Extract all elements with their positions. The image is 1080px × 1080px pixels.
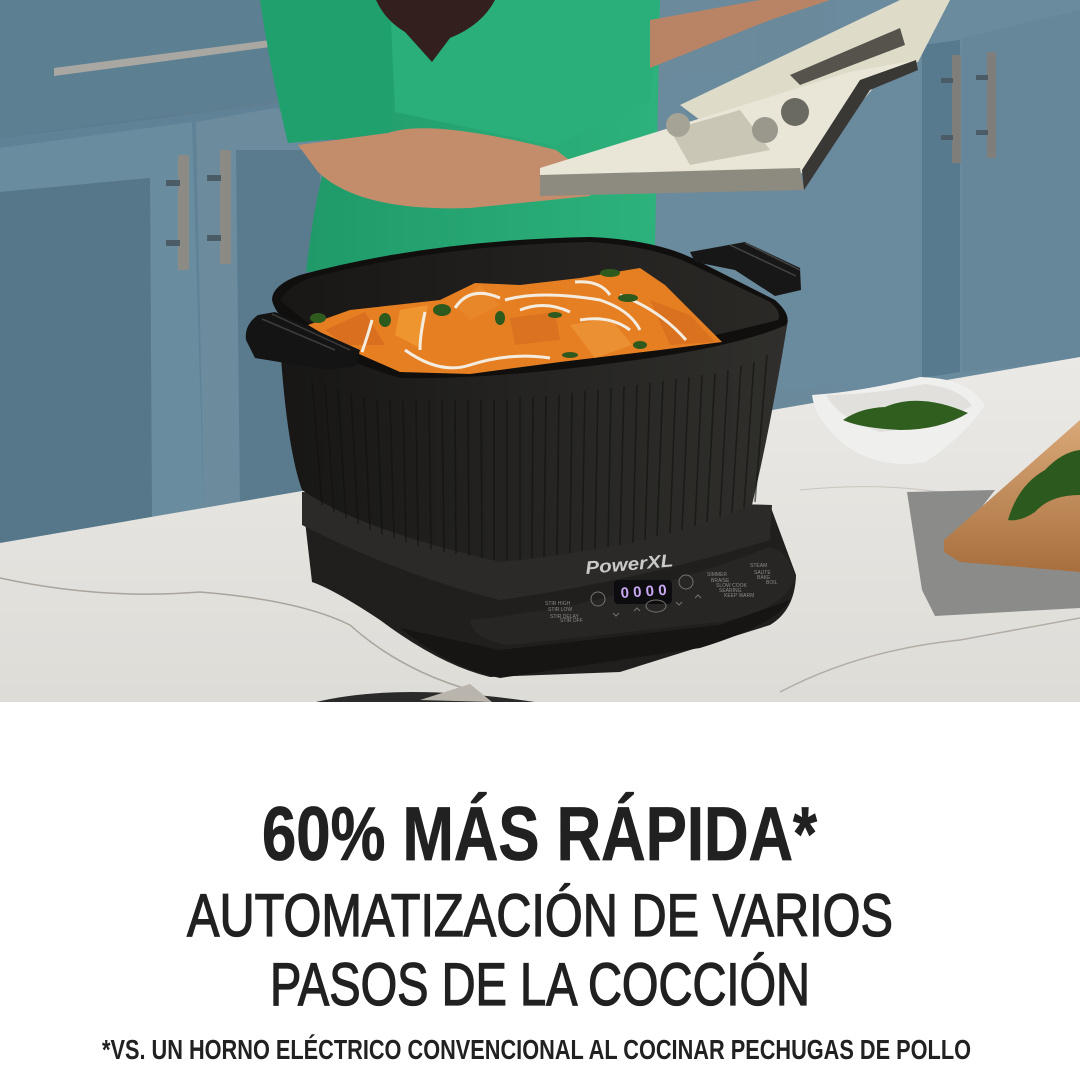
base (302, 492, 796, 678)
function labels: SAUTE (754, 570, 771, 576)
PowerXL logo: PowerXL (585, 550, 674, 578)
function labels: KEEP WARM (724, 593, 754, 599)
food: chicken curry (308, 268, 722, 374)
function labels: STIR HIGH (545, 601, 571, 607)
cabinets background (0, 0, 1080, 560)
white caption panel (0, 702, 1080, 1080)
headline: 60% MÁS RÁPIDA* (262, 792, 817, 877)
function labels: STIR LOW (548, 607, 572, 613)
lid handle (420, 684, 492, 702)
handle: left (246, 312, 360, 370)
cutting board (944, 420, 1080, 572)
function labels: SEARING (719, 588, 742, 594)
digital display (614, 580, 672, 604)
parsley (1008, 450, 1080, 520)
towel (907, 490, 1080, 616)
open book (540, 0, 950, 196)
function labels: STIR OFF (560, 618, 583, 624)
subheading line 2: PASOS DE LA COCCIÓN (270, 951, 810, 1018)
control buttons (591, 575, 701, 616)
person: green top and arms (260, 0, 830, 272)
ribbed pot body (278, 305, 788, 562)
appliance: PowerXL cooker (246, 237, 801, 678)
function labels: STIR DELAY (550, 614, 579, 620)
function labels: STEAM (750, 563, 767, 569)
digital display: 0000 (620, 582, 667, 602)
handle: right (690, 242, 801, 296)
function labels: SIMMER (707, 572, 727, 578)
function labels: BRAISE (711, 578, 730, 584)
function labels: BAKE (757, 575, 771, 581)
photo: kitchen scene (0, 0, 1080, 702)
subheading line 1: AUTOMATIZACIÓN DE VARIOS (187, 882, 893, 949)
function labels (545, 563, 778, 624)
function labels: BOIL (766, 580, 778, 586)
pot rim and interior (272, 237, 788, 378)
cabinet handles (54, 40, 996, 270)
function labels: SLOW COOK (716, 583, 748, 589)
lid at bottom (316, 692, 535, 702)
bowl with herbs (812, 377, 985, 464)
countertop (0, 357, 1080, 702)
